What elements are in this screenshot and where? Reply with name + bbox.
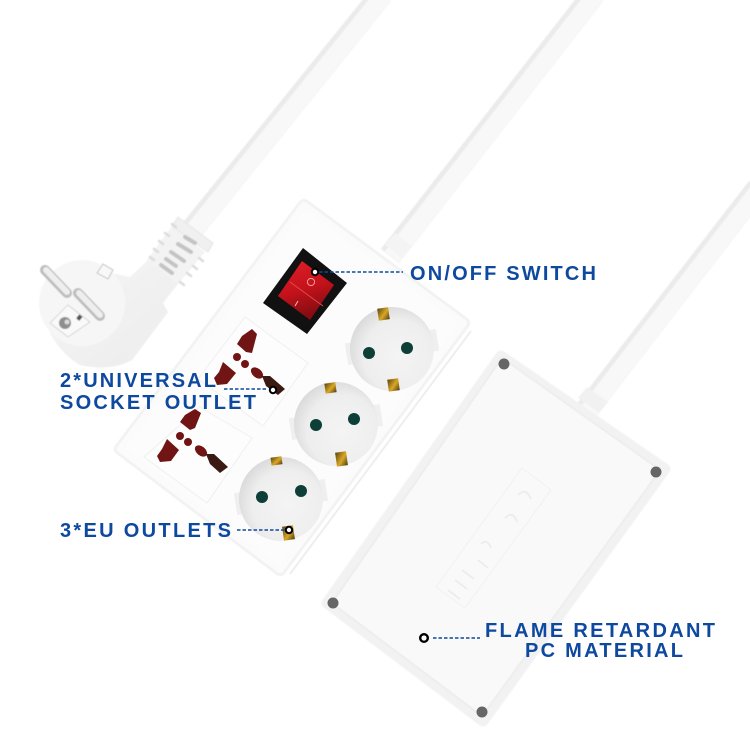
plug strain relief <box>147 217 213 285</box>
callout: flame retardant PC material <box>420 620 715 662</box>
panel: back of power strip <box>327 356 665 721</box>
screws <box>328 358 662 718</box>
universal socket panel: lower <box>144 407 252 503</box>
icon: angled EU plug <box>39 217 213 368</box>
universal socket panel: upper <box>198 317 308 426</box>
panel: front of power strip <box>120 205 471 574</box>
rocker switch <box>263 248 347 334</box>
EU socket: top <box>345 307 439 392</box>
cable: plug cord <box>190 0 384 233</box>
cable: rear strip cord <box>585 188 750 413</box>
plug face <box>39 260 125 346</box>
embossed rating plate <box>436 468 551 608</box>
plug pins <box>45 270 100 316</box>
callout: universal socket outlet: SOCKET OUTLET <box>60 392 256 414</box>
callout: flame retardant PC material: PC MATERIAL <box>525 640 683 662</box>
callout: flame retardant PC material: FLAME RETARDANT <box>485 620 715 642</box>
callout: universal socket outlet <box>60 370 276 414</box>
callout: universal socket outlet: 2*UNIVERSAL <box>60 370 216 392</box>
callout: on/off switch <box>312 263 596 285</box>
callout: on/off switch: ON/OFF SWITCH <box>410 263 596 285</box>
plug body <box>50 260 178 368</box>
callout: EU outlets: 3*EU OUTLETS <box>60 520 231 542</box>
cable: front strip cord <box>390 0 596 257</box>
EU socket: bottom <box>234 456 328 541</box>
EU socket: middle <box>289 382 383 467</box>
